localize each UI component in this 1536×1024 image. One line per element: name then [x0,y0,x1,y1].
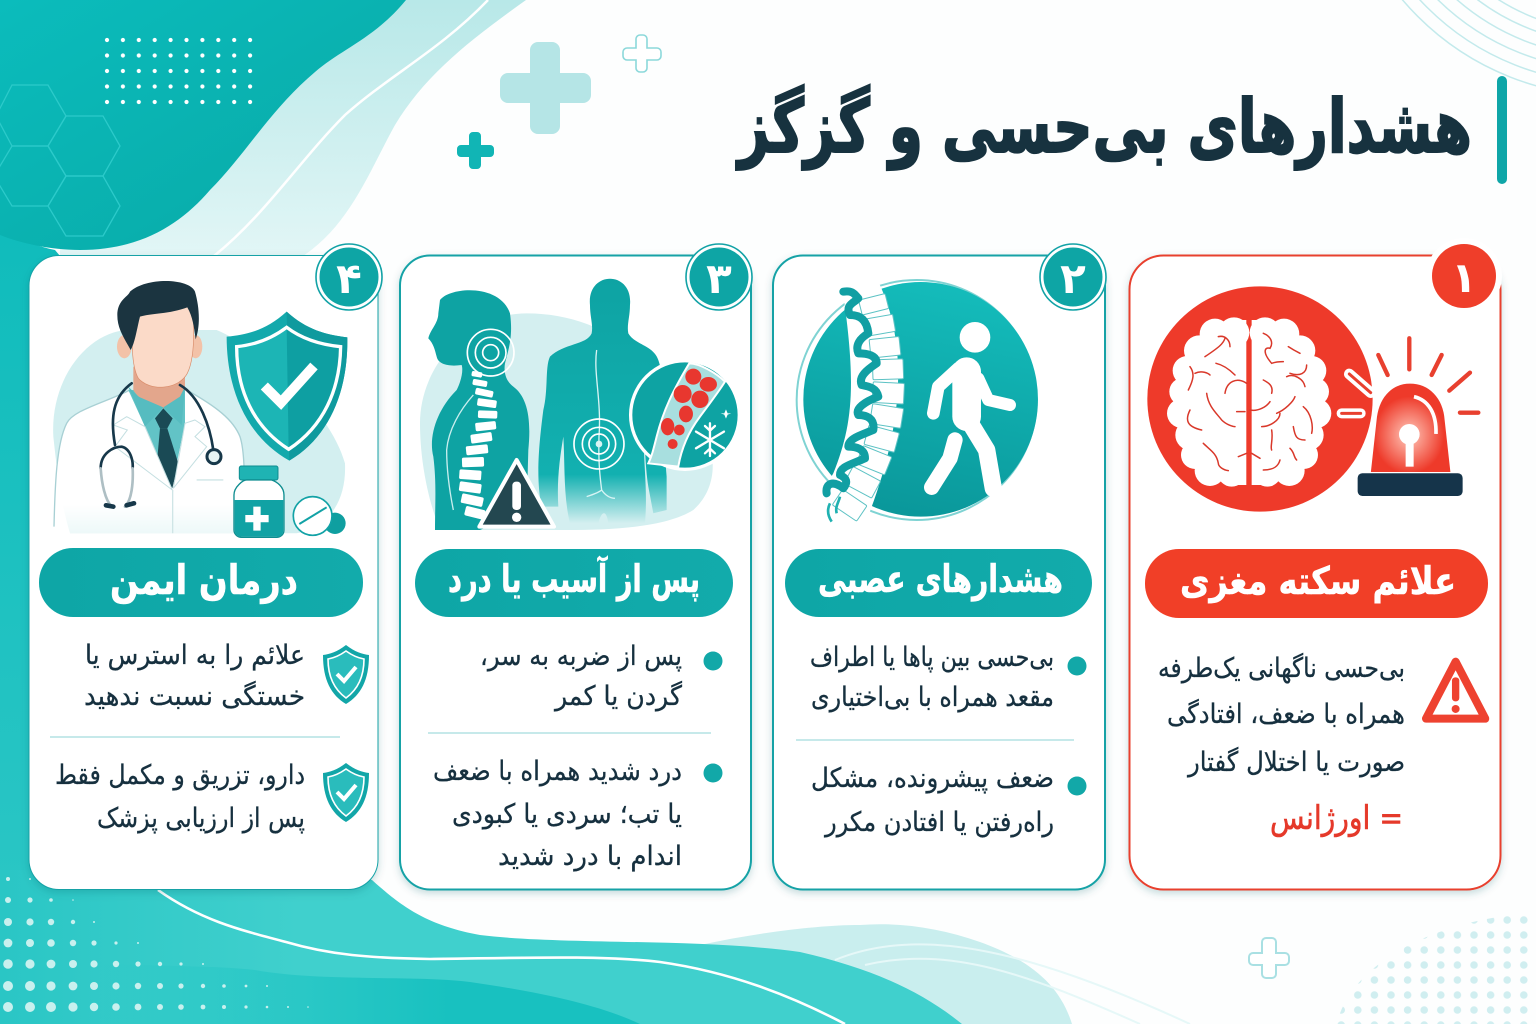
list: safe treatment [50,640,340,834]
icon: doctor, shield and medicine [53,281,347,537]
list: neurological warnings: مقعد همراه با بی‌اختیاری [811,682,1054,713]
list: neurological warnings: ضعف پیشرونده، مشکل [811,763,1054,794]
panel: card 3 after injury or pain [400,244,752,890]
pill heading: neurological warnings: هشدارهای عصبی [818,557,1063,601]
pill heading: after injury or pain: پس از آسیب یا درد [448,555,700,601]
decorative waves top-left [0,0,526,900]
list: after injury or pain: پس از ضربه به سر، [480,641,682,672]
pill heading: stroke symptoms: علائم سکته مغزی [1180,559,1456,604]
badge number 2 [1040,244,1106,310]
list: neurological warnings: راه‌رفتن یا افتادن مکرر [823,807,1054,838]
list: safe treatment: خستگی نسبت ندهید [84,680,305,712]
list: after injury or pain: اندام با درد شدید [498,841,682,872]
list: after injury or pain [428,641,722,872]
plus icons top [457,35,661,169]
pill heading: after injury or pain [415,549,733,617]
title accent bar [1497,76,1507,184]
icon: brain and siren [1147,286,1478,512]
plus outline bottom [1249,938,1289,978]
icon: shield check 1 [323,645,369,704]
icon: shield check 2 [323,763,369,822]
panel: card 1 stroke symptoms [1130,238,1502,890]
list: safe treatment: علائم را به استرس یا [85,640,305,671]
list: after injury or pain: درد شدید همراه با ضعف [433,756,682,787]
list: safe treatment: پس از ارزیابی پزشک [97,803,305,834]
icon: spine and walking figure [797,280,1038,522]
badge number 3: ۳ [706,254,732,303]
list: neurological warnings [796,642,1086,838]
dot field bottom-left [3,877,309,1012]
text block: stroke symptoms: بی‌حسی ناگهانی یک‌طرفه [1158,652,1405,684]
pill heading: stroke symptoms [1145,549,1488,618]
list: after injury or pain: یا تب؛ سردی یا کبودی [452,799,682,830]
icon: body silhouettes with pain points [420,279,739,530]
badge number 4: ۴ [336,254,362,303]
pill heading: safe treatment: درمان ایمن [110,556,298,604]
icon: warning triangle [1426,662,1485,719]
panel: card 4 safe treatment [29,244,382,890]
list: safe treatment: دارو، تزریق و مکمل فقط [55,760,305,791]
hexagon pattern [0,85,120,236]
badge number 1: ۱ [1451,253,1477,302]
badge number 3 [686,244,752,310]
text block: stroke symptoms: صورت یا اختلال گفتار [1186,746,1405,778]
badge number 4 [316,244,382,310]
badge number 2: ۲ [1060,254,1086,303]
pill heading: safe treatment [39,548,363,617]
dot grid top-left [99,32,258,110]
decorative arcs top-right [1338,0,1536,96]
text block: stroke symptoms: همراه با ضعف، افتادگی [1167,698,1405,730]
text block: stroke symptoms [1158,652,1405,837]
bottom waves [0,870,1190,1024]
panel: card 2 neurological warnings [773,244,1106,890]
text block: stroke symptoms: = اورژانس [1270,798,1403,837]
dot field bottom-right [1338,916,1528,1024]
list: neurological warnings: بی‌حسی بین پاها یا اطراف [810,642,1054,673]
list: after injury or pain: گردن یا کمر [553,680,682,712]
pill heading: neurological warnings [785,549,1092,617]
badge number 1 [1426,238,1502,314]
